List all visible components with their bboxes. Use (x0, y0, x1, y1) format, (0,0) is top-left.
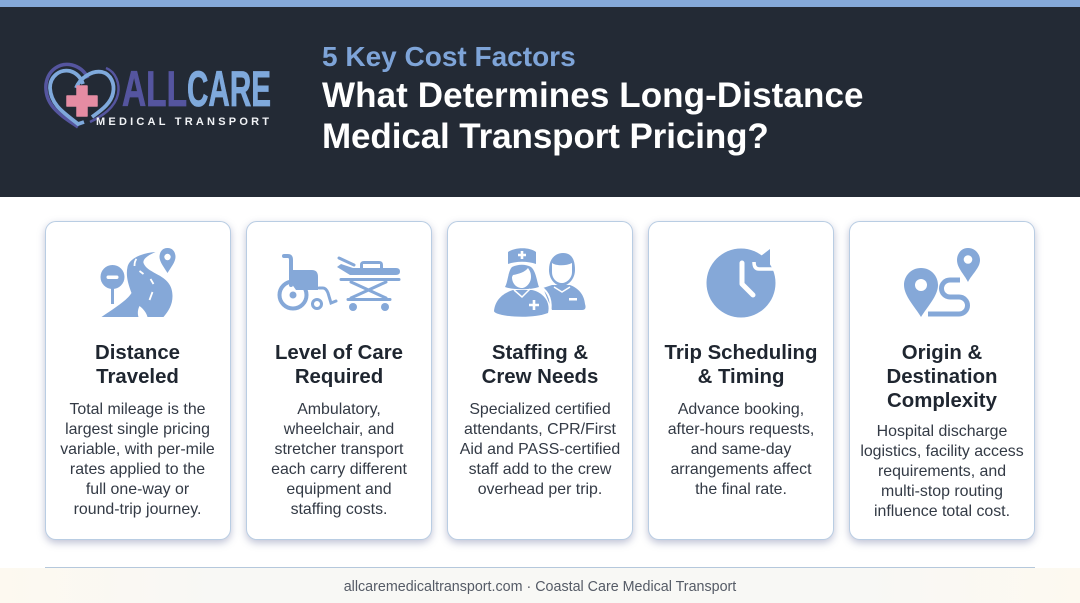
body text: staff add to the crew (469, 461, 611, 478)
footer divider (45, 567, 1035, 568)
icon: medical staff (494, 248, 586, 317)
heading (95, 342, 180, 388)
body text: Ambulatory, (297, 401, 381, 418)
heading: title: What Determines Long-Distance (322, 76, 864, 115)
body text: Aid and PASS-certified (460, 441, 620, 458)
logo: ALL (122, 61, 187, 117)
footer text: allcaremedicaltransport.com · Coastal Care Medical Transport (344, 579, 736, 595)
heading: Complexity (887, 390, 997, 412)
heading: Staffing & (492, 342, 588, 364)
body text: staffing costs. (291, 501, 387, 518)
heading: & Timing (698, 366, 784, 388)
header band (0, 7, 1080, 197)
body text: Specialized certified (469, 401, 611, 418)
body text: arrangements affect (670, 461, 812, 478)
heading (275, 342, 403, 388)
footer band (0, 568, 1080, 603)
heading (482, 342, 598, 388)
heading: Required (295, 366, 383, 388)
body text (460, 401, 620, 498)
icon: winding road (100, 248, 176, 317)
body text: the final rate. (695, 481, 787, 498)
top accent bar (0, 0, 1080, 7)
heading: title: Medical Transport Pricing? (322, 117, 769, 156)
body text: rates applied to the (70, 461, 205, 478)
heading: Destination (886, 366, 998, 388)
body text: multi-stop routing (881, 483, 1003, 500)
body text: full one-way or (86, 481, 189, 498)
heading: Level of Care (275, 342, 403, 364)
logo: MEDICAL TRANSPORT (96, 116, 269, 128)
heading: Crew Needs (482, 366, 598, 388)
body text: largest single pricing (65, 421, 210, 438)
panel: Staffing & Crew Needs (447, 221, 633, 540)
body text: wheelchair, and (284, 421, 394, 438)
body text: overhead per trip. (478, 481, 602, 498)
heading (886, 342, 998, 412)
body text: round-trip journey. (74, 501, 201, 518)
logo (44, 61, 271, 128)
body text: and same-day (691, 441, 791, 458)
heading: subtitle: 5 Key Cost Factors (322, 41, 576, 72)
body text: logistics, facility access (860, 443, 1024, 460)
panel: Level of Care Required (246, 221, 432, 540)
heading: Distance (95, 342, 180, 364)
body text (60, 401, 215, 518)
body text (668, 401, 814, 498)
body text: influence total cost. (874, 503, 1010, 520)
heading (664, 342, 817, 388)
body text: stretcher transport (275, 441, 403, 458)
body text: each carry different (271, 461, 407, 478)
heading: Origin & (902, 342, 982, 364)
body text: attendants, CPR/First (464, 421, 616, 438)
icon: route pins (904, 248, 980, 317)
body text: Advance booking, (678, 401, 804, 418)
heading: title (322, 76, 864, 156)
heading: Trip Scheduling (665, 342, 817, 364)
heading: Traveled (96, 366, 179, 388)
body text (271, 401, 407, 518)
body text: Total mileage is the (69, 401, 206, 418)
body text (860, 423, 1024, 520)
body text: Hospital discharge (877, 423, 1007, 440)
body text: equipment and (286, 481, 392, 498)
body text: requirements, and (878, 463, 1006, 480)
body text: variable, with per-mile (60, 441, 215, 458)
panel: Distance Traveled (44, 221, 230, 540)
panel: Origin & Destination Complexity (849, 221, 1035, 540)
panel: Trip Scheduling & Timing (648, 221, 834, 540)
icon: wheelchair and stretcher (278, 254, 400, 311)
icon: clock with arrow (706, 248, 776, 318)
body text: after-hours requests, (668, 421, 814, 438)
